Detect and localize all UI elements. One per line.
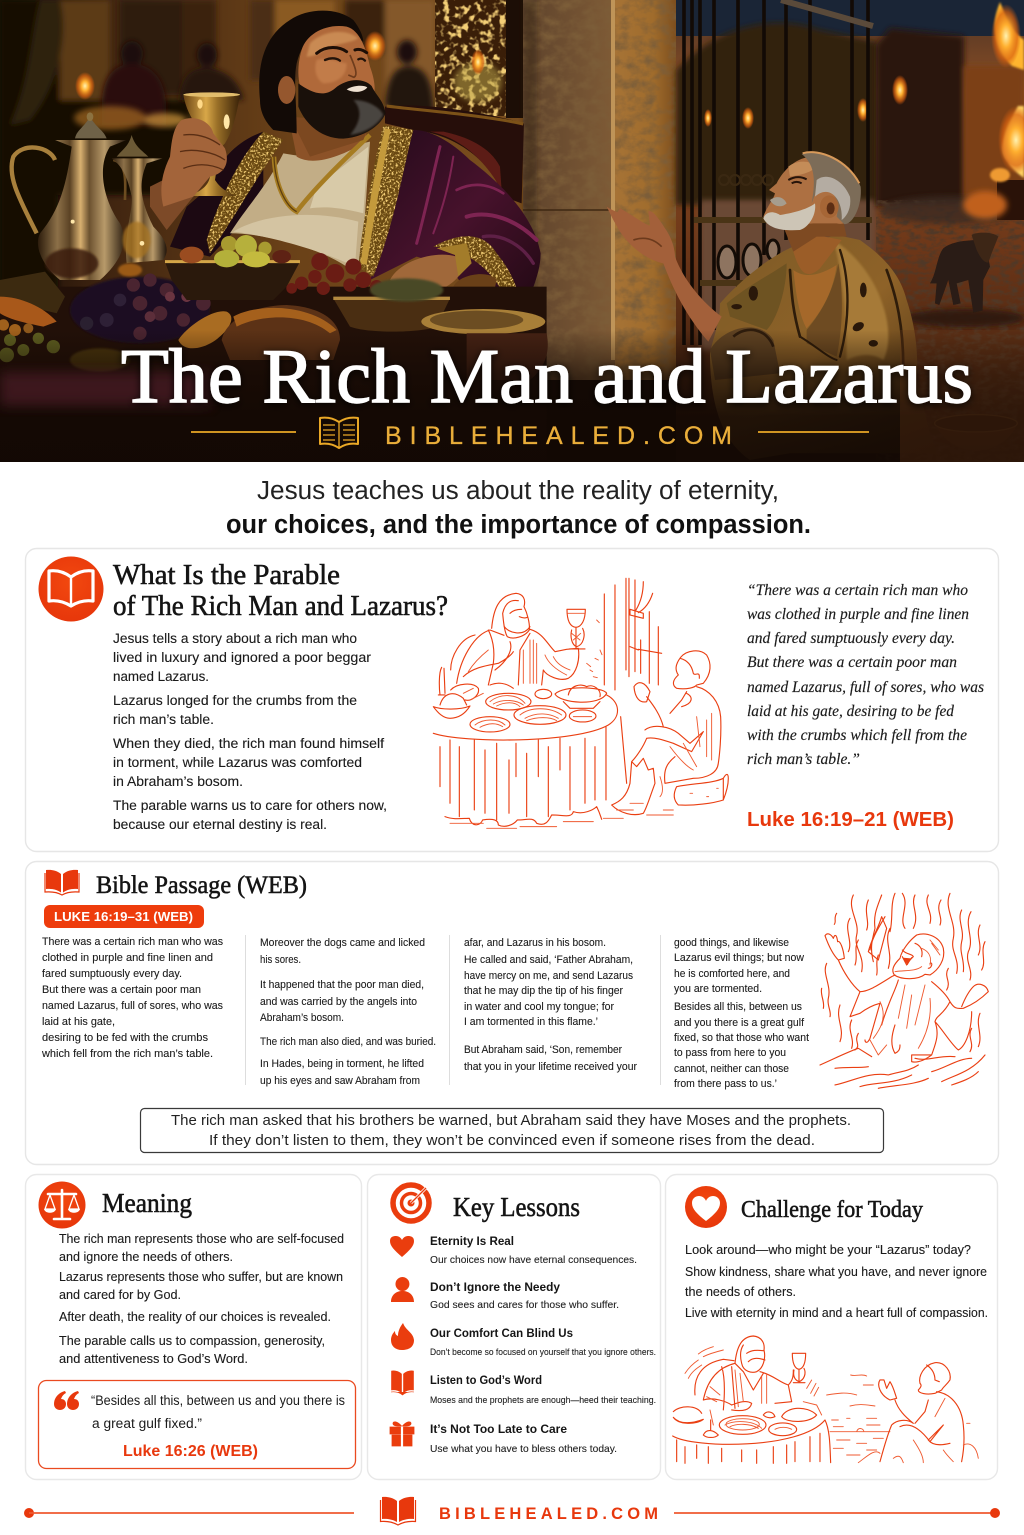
gate bars (684, 0, 873, 345)
quote block: rich man’s table.” (747, 751, 860, 768)
text column 3: afar, and Lazarus in his bosom. (464, 937, 606, 949)
illustration: rich man at table and Lazarus (433, 578, 728, 828)
text column 4: to pass from here to you (674, 1047, 786, 1059)
hero bottom fade (0, 330, 1024, 462)
text column 3 (464, 937, 637, 1073)
heading: Meaning (102, 1188, 192, 1218)
text column 3: in water and cool my tongue; for (464, 1001, 614, 1013)
lesson: eternity is real (390, 1236, 637, 1266)
beard (763, 203, 815, 230)
text column 4 (674, 937, 809, 1090)
goblet (792, 1353, 806, 1383)
neck (296, 117, 366, 156)
lesson: it's not too late to care: Use what you have to bless others today. (430, 1443, 617, 1455)
icon: quote marks (54, 1391, 79, 1410)
subtitle: our choices, and the importance of compassion. (226, 511, 811, 539)
panel: challenge for today (666, 1174, 998, 1480)
ornate window (435, 0, 506, 116)
footer (24, 1497, 1000, 1525)
text column 2: The rich man also died, and was buried. (260, 1036, 436, 1048)
hero painting: feast on table (0, 235, 548, 460)
bread (178, 311, 231, 348)
heading: Bible Passage (WEB) (96, 870, 307, 899)
text column 3: He called and said, ‘Father Abraham, (464, 954, 633, 966)
callout: brothers warned: If they don’t listen to them, they won’t be convinced even if someone rises from the dead. (209, 1132, 815, 1149)
heading (113, 560, 448, 622)
hero painting: Lazarus (607, 151, 917, 445)
hair (259, 11, 363, 133)
text column 4: Besides all this, between us (674, 1001, 802, 1013)
text column 1: There was a certain rich man who was (42, 936, 223, 948)
text column 2: In Hades, being in torment, he lifted (260, 1058, 424, 1070)
lesson: our comfort can blind us: Our Comfort Can Blind Us (430, 1328, 573, 1340)
text block: parable summary: because our eternal destiny is real. (113, 817, 327, 832)
lesson: it's not too late to care (390, 1422, 617, 1455)
icon: target (393, 1185, 429, 1221)
table (673, 1420, 831, 1463)
chair (385, 105, 524, 203)
text column 3: I am tormented in this flame.’ (464, 1016, 598, 1028)
lesson: eternity is real: Eternity Is Real (430, 1236, 514, 1248)
panel: key lessons (368, 1174, 660, 1480)
lesson: don't ignore the needy: Don’t Ignore the Needy (430, 1282, 561, 1294)
hero painting: rich man (150, 10, 541, 287)
face (298, 26, 375, 100)
icon: gift (390, 1422, 414, 1446)
text block: challenge: the needs of others. (685, 1284, 796, 1299)
gold bands (206, 126, 516, 287)
badge (44, 905, 204, 928)
icon: book (45, 870, 79, 895)
lesson: listen to God's word: Listen to God’s Word (430, 1375, 542, 1387)
text block: parable summary: Lazarus longed for the crumbs from the (113, 693, 357, 708)
arm and hand (613, 208, 722, 342)
text block: parable summary: named Lazarus. (113, 669, 209, 684)
text column 4: cannot, neither can those (674, 1063, 789, 1075)
footer site name: BIBLEHEALED.COM (439, 1505, 658, 1523)
text block: parable summary: rich man’s table. (113, 712, 214, 727)
robe (710, 236, 917, 445)
text block: challenge: Live with eternity in mind and a heart full of compassion. (685, 1305, 988, 1320)
text block: meaning: After death, the reality of our choices is revealed. (59, 1309, 331, 1324)
quote block: named Lazarus, full of sores, who was (747, 679, 984, 696)
lesson: don't ignore the needy: God sees and cares for those who suffer. (430, 1299, 619, 1311)
head (763, 158, 844, 224)
neck (784, 224, 846, 252)
text column 2 (260, 937, 436, 1087)
quote block: and fared sumptuously every day. (747, 630, 955, 647)
table top and plates (433, 695, 618, 740)
icon: heart (390, 1236, 414, 1257)
text column 1: desiring to be fed with the crumbs (42, 1032, 208, 1044)
raised forearm (150, 177, 193, 230)
text column 4: good things, and likewise (674, 937, 789, 949)
callout: gulf fixed quote: Luke 16:26 (WEB) (123, 1443, 258, 1460)
quote block: was clothed in purple and fine linen (747, 606, 969, 623)
text block: parable summary: in torment, while Lazarus was comforted (113, 755, 362, 770)
icon: open book in circle (38, 556, 104, 622)
text block: parable summary (113, 631, 387, 832)
illustration: table scene (673, 1336, 978, 1463)
hero painting: dog and bowl (930, 233, 1017, 451)
quote block: laid at his gate, desiring to be fed (747, 703, 954, 720)
footer rule left (24, 1508, 354, 1518)
man head (893, 934, 944, 979)
hand on table (390, 255, 458, 289)
icon: book (391, 1371, 414, 1395)
text block: meaning: and cared for by God. (59, 1287, 181, 1302)
stone seat (674, 774, 728, 805)
text block: parable summary: in Abraham’s bosom. (113, 774, 243, 789)
bowls on the right of table (333, 298, 450, 332)
text block: meaning: The rich man represents those who are self-focused (59, 1231, 344, 1246)
heading: of The Rich Man and Lazarus? (113, 591, 448, 622)
text column 4: from there pass to us.’ (674, 1078, 777, 1090)
illustration: rich man in flames (820, 893, 988, 1088)
quote block (747, 582, 984, 768)
icon: person (391, 1277, 414, 1302)
text block: parable summary: When they died, the rich man found himself (113, 736, 384, 751)
hero painting: banquet room background (0, 0, 676, 462)
Lazarus (918, 1363, 950, 1394)
callout: gulf fixed quote: “Besides all this, between us and you there is (91, 1393, 345, 1408)
lesson: our comfort can blind us: Don’t become so focused on yourself that you ignore others. (430, 1347, 656, 1358)
icon: gold open book (320, 418, 358, 448)
lesson: don't ignore the needy (391, 1277, 619, 1311)
text column 2: Abraham’s bosom. (260, 1012, 344, 1024)
flames (821, 893, 985, 1052)
text column 1: named Lazarus, full of sores, who was (42, 1000, 223, 1012)
hero painting: iron gate and night street (672, 0, 1024, 404)
text block: meaning: Lazarus represents those who suffer, but are known (59, 1269, 343, 1284)
text column 2: and was carried by the angels into (260, 996, 417, 1008)
footer rule right (674, 1508, 1000, 1518)
callout: brothers warned (140, 1108, 884, 1152)
text column 3: have mercy on me, and send Lazarus (464, 970, 633, 982)
text block: meaning: The parable calls us to compassion, generosity, (59, 1333, 325, 1348)
text column 2: up his eyes and saw Abraham from (260, 1075, 420, 1087)
text column 4: you are tormented. (674, 983, 762, 995)
panel: meaning (26, 1174, 362, 1480)
text block: parable summary: The parable warns us to care for others now, (113, 798, 387, 813)
text column 4: he is comforted here, and (674, 968, 790, 980)
text block: meaning: and attentiveness to God’s Word. (59, 1351, 248, 1366)
badge: LUKE 16:19–31 (WEB) (54, 910, 193, 924)
quote block: with the crumbs which fell from the (747, 727, 967, 744)
text column 1 (41, 936, 223, 1060)
hero banner (0, 0, 1024, 462)
text column 2: It happened that the poor man died, (260, 979, 424, 991)
hair (802, 152, 861, 224)
reference: Luke 16:19–21 (WEB) (747, 809, 954, 831)
text column 2: Moreover the dogs came and licked (260, 937, 425, 949)
hand holding goblet (161, 118, 227, 207)
icon: scales (38, 1182, 86, 1228)
rich man (735, 1336, 765, 1372)
beard (298, 80, 386, 139)
man body (825, 934, 988, 1062)
site name: BIBLEHEALED.COM (385, 422, 732, 450)
waves at bottom (820, 1048, 985, 1088)
tablecloth folds (440, 717, 627, 820)
subtitle (226, 477, 811, 539)
text block: challenge (685, 1242, 988, 1320)
text block: parable summary: lived in luxury and ignored a poor beggar (113, 650, 372, 665)
text column 4: fixed, so that those who want (674, 1032, 809, 1044)
heading: Key Lessons (453, 1192, 580, 1222)
panel: bible passage (26, 862, 998, 1164)
text column 3: But Abraham said, ‘Son, remember (464, 1044, 622, 1056)
robe (170, 132, 263, 257)
text block: challenge: Show kindness, share what you have, and never ignore (685, 1264, 987, 1279)
goblet (567, 609, 585, 649)
rich man (492, 593, 530, 638)
heading: What Is the Parable (113, 560, 340, 591)
subtitle: Jesus teaches us about the reality of eternity, (257, 477, 779, 505)
text block: parable summary: Jesus tells a story about a rich man who (113, 631, 357, 646)
Lazarus (673, 651, 710, 689)
text column 3: that you in your lifetime received your (464, 1061, 637, 1073)
text column 1: But there was a certain poor man (42, 984, 201, 996)
text block: challenge: Look around—who might be your “Lazarus” today? (685, 1242, 971, 1257)
quote block: But there was a certain poor man (747, 654, 957, 671)
fruit bowl (165, 262, 300, 300)
background guests (102, 40, 434, 125)
text block: meaning (59, 1231, 344, 1366)
lesson: eternity is real: Our choices now have eternal consequences. (430, 1254, 637, 1266)
divider lines beside site name (191, 431, 869, 433)
chest (793, 235, 842, 274)
text column 1: laid at his gate, (42, 1016, 115, 1028)
text column 2: his sores. (260, 954, 301, 966)
icon: footer book (380, 1497, 416, 1525)
candles and back-table glow (74, 31, 485, 130)
goblet (183, 95, 240, 196)
horizon (827, 1375, 890, 1455)
hero painting: jugs (12, 112, 167, 280)
callout: gulf fixed quote (38, 1380, 356, 1468)
icon: flame (391, 1323, 414, 1350)
callout: brothers warned: The rich man asked that his brothers be warned, but Abraham said they have Moses and the prophets. (171, 1112, 851, 1129)
icon: heart in circle (685, 1186, 727, 1228)
text column 3: that he may dip the tip of his finger (464, 985, 623, 997)
red grapes (286, 253, 383, 295)
panel: what is the parable (26, 548, 998, 852)
tunic (230, 142, 370, 267)
text column 1: which fell from the rich man’s table. (41, 1048, 213, 1060)
lesson: listen to God's word (391, 1371, 656, 1406)
knee (710, 327, 780, 380)
lesson: our comfort can blind us (391, 1323, 656, 1358)
heading: Challenge for Today (741, 1196, 924, 1223)
text column 4: Lazarus evil things; but now (674, 952, 804, 964)
quote block: “There was a certain rich man who (747, 582, 968, 599)
text block: meaning: and ignore the needs of others. (59, 1249, 233, 1264)
hero painting: stone pillar (523, 0, 676, 380)
title: The Rich Man and Lazarus (121, 333, 973, 419)
text column 1: fared sumptuously every day. (42, 968, 182, 980)
text column 1: clothed in purple and fine linen and (42, 952, 213, 964)
callout: gulf fixed quote: a great gulf fixed.” (92, 1416, 202, 1431)
lesson: listen to God's word: Moses and the prophets are enough—heed their teaching. (430, 1395, 656, 1406)
text column 4: and you there is a great gulf (674, 1017, 805, 1029)
lesson: it's not too late to care: It’s Not Too Late to Care (430, 1424, 567, 1436)
door and curtain (604, 578, 662, 690)
